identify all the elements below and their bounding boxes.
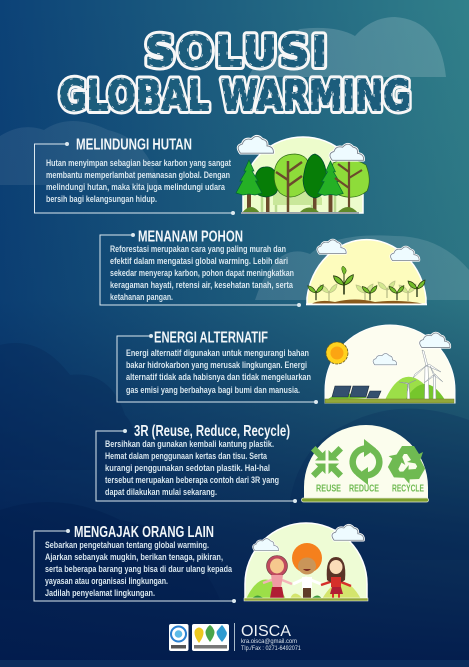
- icon: reuse reduce recycle: REDUCE: [349, 482, 379, 494]
- panel: 3R: kurangi penggunakan sedotan plastik. Hal-hal: [105, 463, 270, 474]
- panel: energi alternatif: Energi alternatif digunakan untuk mengurangi bahan: [126, 348, 309, 359]
- panel: menanam pohon: MENANAM POHON: [138, 228, 243, 246]
- title: [59, 27, 411, 120]
- title: SOLUSI: [145, 27, 327, 76]
- panel: menanam pohon: sekedar menyerap karbon, pohon dapat meningkatkan: [110, 268, 294, 279]
- icon: forest: [236, 136, 369, 214]
- panel: mengajak orang lain: Jadilah penyelamat lingkungan.: [45, 588, 155, 599]
- icon: recycle: [383, 446, 430, 487]
- footer: kra.oisca@gmail.com: [241, 639, 297, 645]
- girl with hijab: [263, 556, 292, 598]
- panel: mengajak orang lain: Ajarkan sebanyak mugkin, berikan tenaga, pikiran,: [45, 552, 223, 563]
- boy with orange hair: [292, 543, 322, 598]
- panel: energi alternatif: alternatif tidak ada habisnya dan tidak mengeluarkan: [126, 372, 311, 383]
- panel: menanam pohon: efektif dalam mengatasi global warming. Lebih dari: [110, 256, 288, 267]
- panel: menanam pohon: ketahanan pangan.: [110, 292, 173, 303]
- title: SOLUSI: [145, 27, 327, 76]
- panel: energi alternatif: [117, 330, 318, 404]
- panel: mengajak orang lain: serta beberapa barang yang bisa di daur ulang kepada: [45, 564, 232, 575]
- panel: menanam pohon: keragaman hayati, retensi air, kesehatan tanah, serta: [110, 280, 294, 291]
- panel: 3R: 3R (Reuse, Reduce, Recycle): [134, 423, 290, 440]
- panel: energi alternatif: ENERGI ALTERNATIF: [154, 330, 268, 346]
- panel: melindungi hutan: melindungi hutan, maka kita juga melindungi udara: [46, 182, 226, 193]
- panel: 3R: tersebut merupakan beberapa contoh dari 3R yang: [105, 475, 279, 486]
- panel: menanam pohon: Reforestasi merupakan cara yang paling murah dan: [110, 244, 286, 255]
- panel: energi alternatif: gas emisi yang berbahaya bagi bumi dan manusia.: [126, 385, 300, 396]
- title: SOLUSI: [145, 27, 327, 76]
- panel: menanam pohon: [100, 228, 301, 307]
- panel: melindungi hutan: membantu memperlambat pemanasan global. Dengan: [46, 170, 230, 181]
- icon: reuse reduce recycle: REUSE: [316, 482, 341, 494]
- footer: OISCA: [241, 623, 291, 640]
- panel: mengajak orang lain: yayasan atau organisasi lingkungan.: [45, 576, 168, 587]
- panel: energi alternatif: bakar hidrokarbon yang merusak lingkungan. Energi: [126, 360, 307, 371]
- footer: [169, 623, 302, 652]
- panel: 3R: Bersihkan dan gunakan kembali kantung plastik.: [105, 439, 274, 450]
- panel: 3R: dapat dilakukan mulai sekarang.: [105, 487, 217, 498]
- girl with red shirt: [321, 557, 351, 598]
- footer: Tlp./Fax : 0271-6492071: [241, 646, 302, 652]
- panel: melindungi hutan: [34, 136, 235, 215]
- panel: mengajak orang lain: Sebarkan pengetahuan tentang global warming.: [45, 540, 209, 551]
- icon: reuse reduce recycle: [302, 425, 430, 502]
- panel: mengajak orang lain: MENGAJAK ORANG LAIN: [74, 524, 214, 541]
- logo: Children's Forest Program: [192, 624, 229, 651]
- panel: mengajak orang lain: [34, 524, 236, 603]
- icon: reuse: [311, 446, 343, 478]
- panel: 3R: [96, 423, 297, 503]
- panel: melindungi hutan: bersih bagi kelangsungan hidup.: [46, 194, 157, 205]
- icon: reduce: [353, 439, 379, 485]
- logo: OISCA: [169, 624, 188, 651]
- panel: melindungi hutan: MELINDUNGI HUTAN: [76, 136, 192, 154]
- icon: seedlings: [306, 240, 427, 305]
- icon: renewable energy: [325, 325, 455, 403]
- icon: reuse reduce recycle: RECYCLE: [392, 482, 424, 494]
- panel: melindungi hutan: Hutan menyimpan sebagian besar karbon yang sangat: [46, 158, 232, 169]
- panel: 3R: Hemat dalam penggunaan kertas dan tisu. Serta: [105, 451, 267, 462]
- icon: children holding hands: [244, 523, 368, 601]
